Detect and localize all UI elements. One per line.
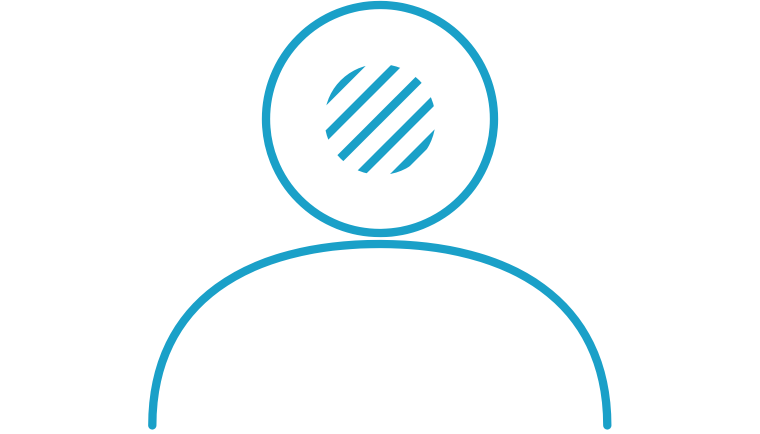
icon: person [148, 0, 612, 430]
head circle [266, 5, 494, 233]
icon: person outline [152, 5, 607, 426]
shoulders arc [152, 244, 607, 426]
hatched inner circle [326, 65, 435, 174]
